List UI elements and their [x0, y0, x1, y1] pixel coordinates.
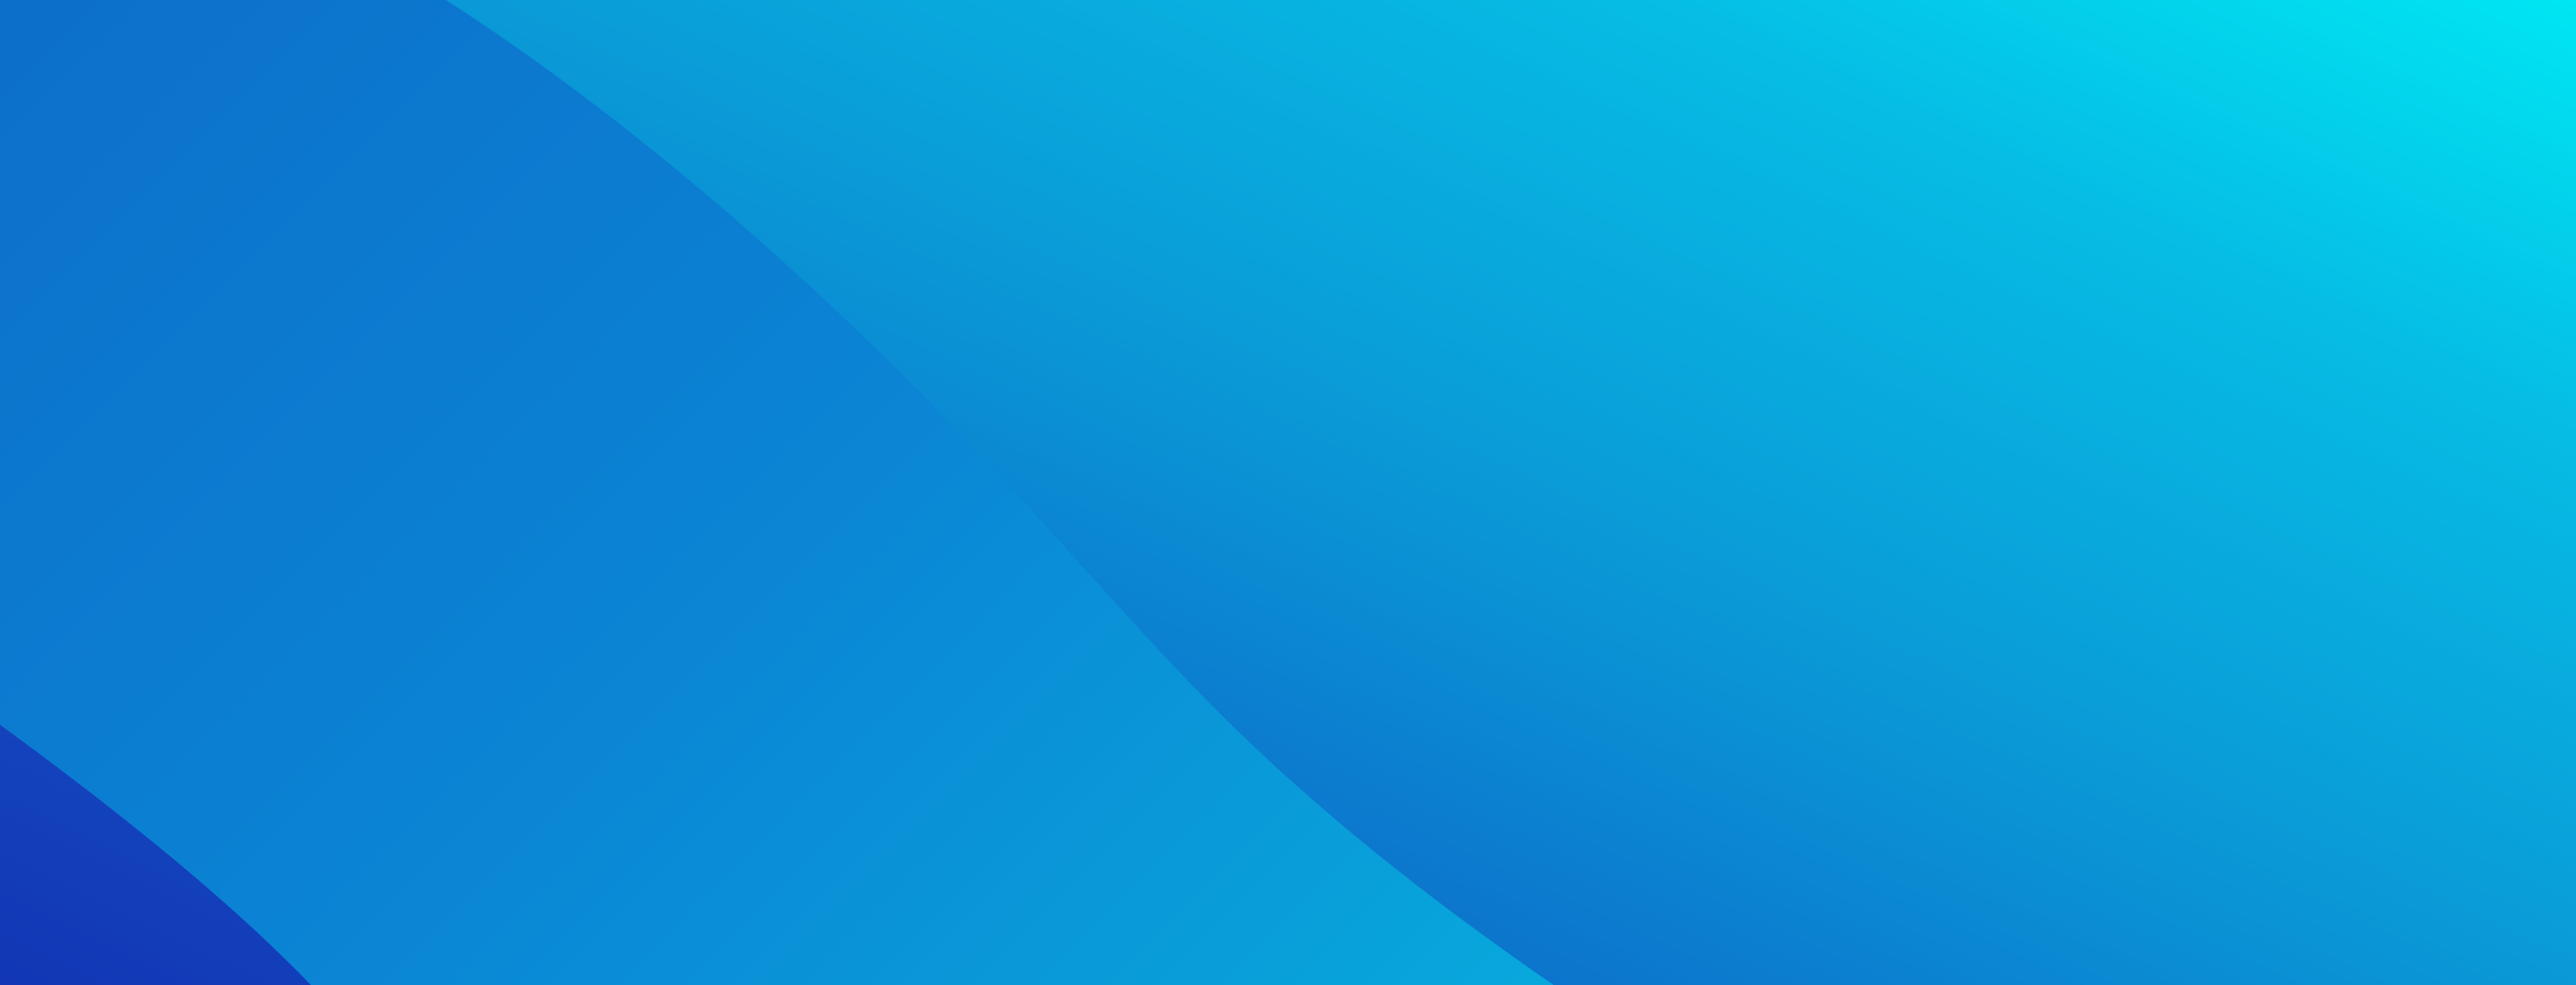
- panel: middle blue curved band: [0, 0, 1554, 985]
- panel: bottom-left dark blue corner: [0, 725, 311, 985]
